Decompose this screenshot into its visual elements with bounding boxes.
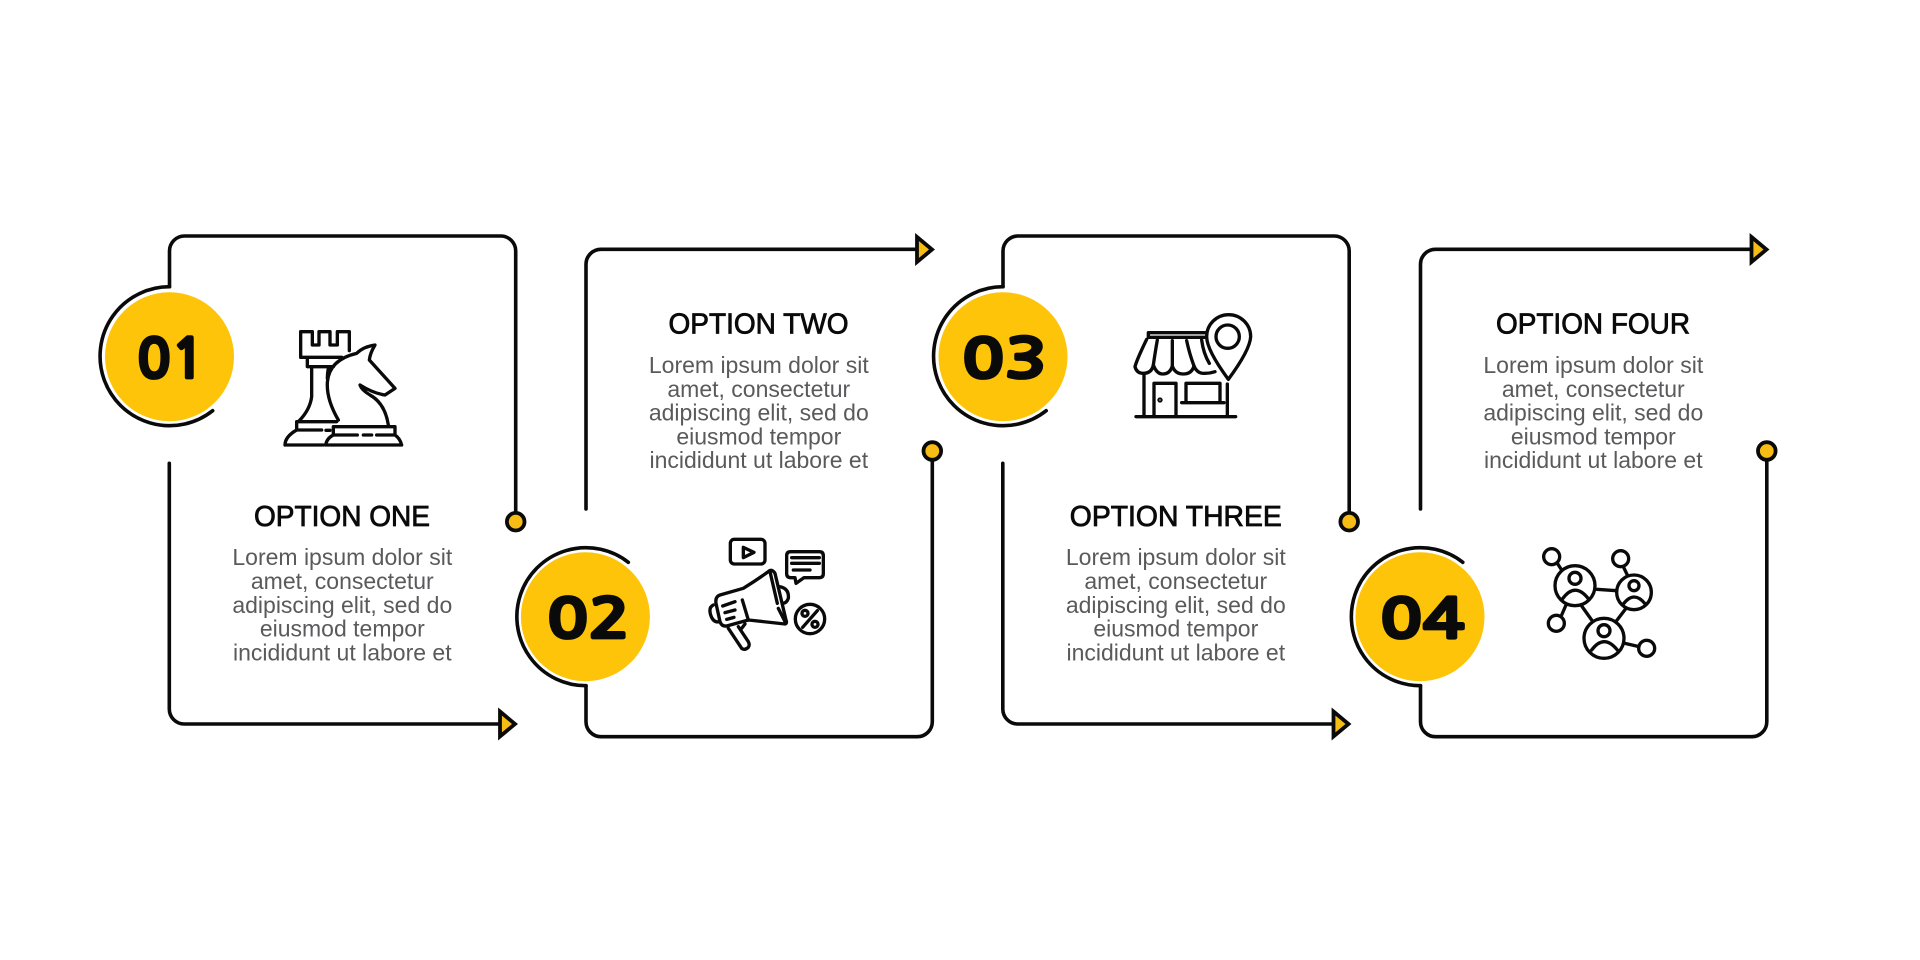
panel: option three <box>934 236 1358 736</box>
text block: option two: amet, consectetur <box>667 376 851 402</box>
panel: option two <box>517 237 941 737</box>
panel two outline and arrow <box>517 237 941 737</box>
number badge 01: 01 <box>137 334 205 387</box>
text block: option two: incididunt ut labore et <box>649 447 869 473</box>
text block: option four: eiusmod tempor <box>1511 423 1676 449</box>
text block: option three: adipiscing elit, sed do <box>1066 592 1286 618</box>
text block: option four: adipiscing elit, sed do <box>1483 400 1703 426</box>
heading: option four: OPTION FOUR <box>1496 308 1690 340</box>
text block: option three: amet, consectetur <box>1084 568 1268 594</box>
panel four outline and arrow <box>1351 237 1776 737</box>
icon: storefront with location pin <box>1135 315 1251 417</box>
heading: option one: OPTION ONE <box>254 501 430 533</box>
text block: option three: Lorem ipsum dolor sit <box>1066 544 1286 570</box>
text block: option three: eiusmod tempor <box>1093 616 1259 642</box>
text block: option four: amet, consectetur <box>1502 376 1685 402</box>
number badge 04 <box>1356 552 1484 681</box>
text block: option four: incididunt ut labore et <box>1484 447 1703 473</box>
text block: option one: amet, consectetur <box>251 568 434 594</box>
number badge 03 <box>938 292 1068 421</box>
heading: option three: OPTION THREE <box>1070 501 1282 533</box>
icon: chess rook and knight <box>285 332 402 445</box>
text block: option one: eiusmod tempor <box>260 616 425 642</box>
number badge 02: 02 <box>547 594 630 647</box>
text block: option one: adipiscing elit, sed do <box>232 592 452 618</box>
number badge 03: 03 <box>962 334 1047 387</box>
number badge 02 <box>521 552 650 681</box>
number badge 04: 04 <box>1380 594 1465 647</box>
text block: option three <box>1066 544 1286 666</box>
text block: option three: incididunt ut labore et <box>1066 640 1286 666</box>
text block: option two: adipiscing elit, sed do <box>649 400 869 426</box>
text block: option two: eiusmod tempor <box>676 423 842 449</box>
heading: option two: OPTION TWO <box>668 308 848 340</box>
panel: option one <box>100 236 524 736</box>
text block: option two: Lorem ipsum dolor sit <box>649 352 869 378</box>
text block: option two <box>649 352 869 473</box>
panel: option four <box>1351 237 1776 737</box>
text block: option one <box>232 544 453 666</box>
icon: people network <box>1544 549 1655 658</box>
text block: option one: incididunt ut labore et <box>233 640 452 666</box>
text block: option four <box>1483 352 1704 473</box>
icon: megaphone with media bubbles <box>710 539 825 649</box>
number badge 01 <box>105 292 234 421</box>
panel three outline and arrow <box>934 236 1358 736</box>
text block: option four: Lorem ipsum dolor sit <box>1483 352 1704 378</box>
text block: option one: Lorem ipsum dolor sit <box>232 544 453 570</box>
panel one outline and arrow <box>100 236 524 736</box>
